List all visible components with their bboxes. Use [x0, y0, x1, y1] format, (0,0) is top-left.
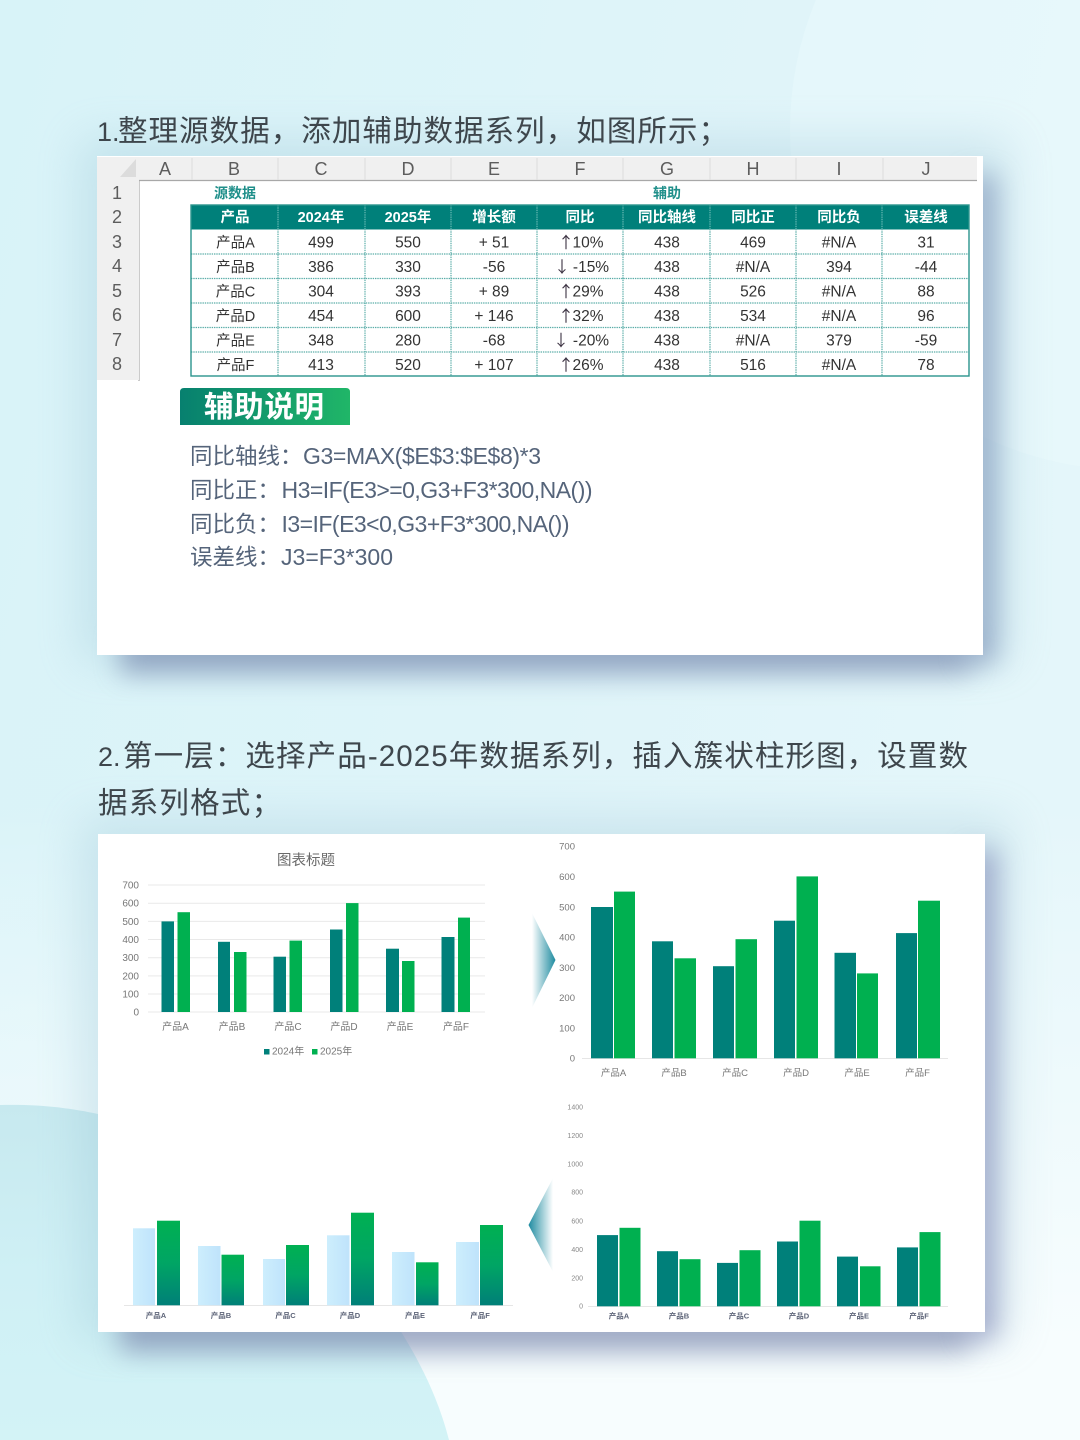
data table: 438: [654, 284, 680, 300]
data table: [191, 205, 969, 376]
spreadsheet column headers: A: [159, 159, 171, 179]
data table: -20%: [573, 332, 609, 350]
data table: 31: [917, 234, 935, 252]
chart: axis max 1400: 1000: [567, 1162, 583, 1168]
data table: 78: [917, 357, 935, 374]
data table: 2025年: [385, 208, 431, 226]
spreadsheet row headers: 6: [112, 305, 122, 325]
chart: default clustered column: 200: [122, 972, 139, 982]
chart: default clustered column: 产品E: [387, 1020, 414, 1033]
chart: gradient fill columns: 产品B: [211, 1310, 232, 1320]
formula notes: G3=MAX($E$3:$E$8)*3: [303, 443, 541, 469]
data table: 产品A: [216, 234, 255, 252]
data table: 516: [740, 357, 766, 374]
data table: + 107: [474, 357, 514, 374]
chart: default clustered column: 0: [133, 1008, 139, 1018]
title: step 1: 1.: [97, 117, 120, 147]
data table: 520: [395, 357, 421, 374]
spreadsheet column headers: J: [922, 159, 930, 179]
chart: no gridlines: [559, 842, 948, 1079]
data table: 348: [308, 332, 334, 350]
data table: ↓: [554, 254, 570, 278]
chart: default clustered column: 500: [122, 917, 139, 928]
title: step 2: 2.: [98, 742, 121, 772]
spreadsheet row headers: 1: [112, 183, 122, 203]
data table: 438: [654, 332, 680, 350]
data table: 26%: [572, 357, 604, 374]
chart: default clustered column: 600: [122, 898, 139, 910]
spreadsheet column headers: C: [314, 159, 328, 179]
chart: no gridlines: 产品A: [601, 1067, 627, 1079]
title: step 2: 第一层：选择产品-2025年数据系列，插入簇状柱形图，设置数: [123, 740, 968, 773]
data table: 产品E: [216, 332, 255, 350]
chart: default clustered column: 图表标题: [277, 852, 335, 869]
legend: [264, 1044, 352, 1058]
data table: 304: [308, 284, 334, 300]
data table: 产品: [220, 209, 250, 226]
data table: #N/A: [822, 308, 857, 325]
data table: 379: [826, 332, 852, 350]
chart: default clustered column: 产品D: [330, 1020, 358, 1033]
data table: 454: [308, 308, 334, 325]
data table: 29%: [572, 284, 604, 300]
title: step 2: [98, 740, 968, 820]
chart: axis max 1400: 产品D: [789, 1310, 810, 1320]
data table: 同比: [566, 209, 594, 226]
chart: no gridlines: 产品E: [844, 1067, 870, 1079]
chart: default clustered column: 700: [122, 880, 139, 892]
chart: no gridlines: 产品B: [661, 1067, 687, 1079]
spreadsheet row headers: 7: [112, 330, 122, 350]
chart: default clustered column: 产品C: [274, 1020, 302, 1033]
chart: no gridlines: 300: [559, 963, 575, 974]
chart: default clustered column: 产品F: [443, 1020, 469, 1033]
panel: chart formatting steps: [98, 834, 985, 1332]
data table: 同比轴线: [638, 208, 696, 226]
data table: 394: [826, 259, 852, 276]
data table: -44: [915, 259, 938, 276]
data table: 误差线: [904, 208, 948, 226]
chart: gradient fill columns: 产品D: [340, 1310, 361, 1320]
chart: default clustered column: 产品B: [219, 1020, 246, 1033]
chart: no gridlines: 产品D: [783, 1067, 809, 1079]
chart: axis max 1400: [567, 1104, 948, 1320]
chart: axis max 1400: 产品E: [849, 1310, 869, 1320]
data table: 280: [395, 332, 421, 350]
legend: 2025年: [320, 1044, 352, 1058]
data table: -15%: [573, 259, 609, 276]
data table: #N/A: [736, 332, 771, 350]
chart: axis max 1400: 1400: [567, 1104, 583, 1112]
panel shadows: [80, 138, 1010, 1352]
data table: 同比正: [731, 209, 775, 226]
data table: #N/A: [822, 284, 857, 300]
chart: axis max 1400: 产品B: [669, 1310, 690, 1320]
data table: 386: [308, 259, 334, 276]
spreadsheet column headers: G: [660, 159, 674, 179]
arrow: right: [532, 913, 556, 1008]
chart: axis max 1400: 产品A: [609, 1310, 630, 1320]
data table: 产品F: [217, 357, 255, 374]
formula notes: I3=IF(E3<0,G3+F3*300,NA()): [282, 511, 570, 537]
title: step 1: 整理源数据，添加辅助数据系列，如图所示；: [118, 115, 728, 148]
spreadsheet column headers: I: [836, 159, 842, 179]
data table: #N/A: [736, 259, 771, 276]
data table: 438: [654, 259, 680, 276]
data table: 330: [395, 259, 421, 276]
panel: source data spreadsheet: [97, 156, 983, 655]
chart: axis max 1400: 产品C: [729, 1310, 750, 1320]
chart: default clustered column: 300: [122, 953, 139, 964]
formula notes: 误差线：: [190, 545, 280, 570]
chart: axis max 1400: 800: [571, 1190, 583, 1196]
spreadsheet column headers: D: [402, 159, 414, 179]
chart: no gridlines: 100: [559, 1024, 575, 1034]
data table: 增长额: [472, 208, 516, 226]
data table: 产品D: [216, 308, 255, 325]
data table: + 51: [479, 234, 509, 252]
group labels: 源数据: [214, 185, 256, 201]
spreadsheet column headers: H: [746, 159, 760, 179]
badge: helper notes: 辅助说明: [204, 391, 324, 424]
data table: -68: [483, 332, 505, 350]
data table: -56: [483, 259, 505, 276]
legend: 2024年: [272, 1044, 304, 1058]
data table: 产品B: [216, 259, 255, 276]
spreadsheet column headers: F: [574, 159, 586, 179]
chart: no gridlines: 400: [559, 932, 575, 944]
formula notes: [190, 443, 592, 570]
data table: 同比负: [817, 209, 861, 226]
chart: default clustered column: [122, 852, 485, 1058]
data table: 10%: [572, 234, 604, 252]
formula notes: H3=IF(E3>=0,G3+F3*300,NA()): [282, 477, 592, 503]
spreadsheet column headers: B: [228, 159, 240, 179]
chart: no gridlines: 700: [559, 842, 575, 852]
spreadsheet column headers: [97, 157, 977, 381]
chart: gradient fill columns: 产品E: [405, 1310, 425, 1320]
data table: 526: [740, 284, 766, 300]
chart: default clustered column: 产品A: [162, 1020, 189, 1033]
formula notes: J3=F3*300: [281, 544, 393, 570]
data table: 88: [917, 284, 935, 300]
chart: no gridlines: 0: [570, 1054, 575, 1064]
data table: 438: [654, 357, 680, 374]
chart: gradient fill columns: 产品F: [470, 1310, 490, 1320]
data table: 469: [740, 234, 766, 252]
chart: axis max 1400: 产品F: [909, 1310, 929, 1320]
badge: helper notes: [180, 388, 350, 425]
data table: ↑: [558, 352, 574, 376]
data table: 32%: [572, 308, 604, 325]
data table: 438: [654, 308, 680, 325]
data table: + 89: [479, 284, 509, 300]
chart: axis max 1400: 200: [571, 1276, 583, 1282]
chart: no gridlines: 200: [559, 993, 575, 1004]
group labels: 辅助: [653, 185, 681, 201]
data table: #N/A: [822, 234, 857, 252]
data table: 600: [395, 308, 421, 325]
spreadsheet row headers: 3: [112, 232, 122, 252]
data table: + 146: [474, 308, 514, 325]
formula notes: 同比轴线：: [190, 444, 303, 469]
formula notes: 同比正：: [190, 478, 280, 503]
data table: 499: [308, 234, 334, 252]
chart: gradient fill columns: 产品A: [146, 1310, 167, 1320]
chart: no gridlines: 500: [559, 902, 575, 914]
chart: axis max 1400: 400: [571, 1247, 583, 1254]
title: step 2: 据系列格式；: [98, 787, 281, 820]
spreadsheet row headers: 4: [112, 256, 122, 276]
spreadsheet row headers: [97, 180, 139, 380]
spreadsheet row headers: 8: [112, 354, 122, 374]
data table: 2024年: [298, 208, 344, 226]
data table: ↓: [553, 327, 569, 351]
spreadsheet column headers: E: [488, 159, 500, 179]
data table: 413: [308, 357, 334, 374]
data table: 534: [740, 308, 766, 325]
data table: 393: [395, 284, 421, 300]
chart: no gridlines: 600: [559, 872, 575, 883]
data table: 550: [395, 234, 421, 252]
data table: ↑: [558, 302, 574, 326]
data table: ↑: [558, 229, 574, 253]
data table: 产品C: [216, 284, 255, 300]
chart: default clustered column: 100: [122, 990, 139, 1000]
chart: no gridlines: 产品F: [905, 1067, 930, 1079]
data table: 438: [654, 234, 680, 252]
data table: -59: [915, 332, 937, 350]
chart: default clustered column: 400: [122, 935, 139, 946]
chart: no gridlines: 产品C: [722, 1067, 748, 1079]
chart: axis max 1400: 0: [579, 1304, 583, 1310]
spreadsheet row headers: 2: [112, 207, 122, 227]
data table: 96: [917, 308, 935, 325]
data table: #N/A: [822, 357, 857, 374]
spreadsheet row headers: 5: [112, 281, 122, 301]
formula notes: 同比负：: [190, 512, 280, 537]
arrow: left: [528, 1178, 553, 1272]
chart: axis max 1400: 1200: [567, 1133, 583, 1140]
data table: ↑: [558, 278, 574, 302]
chart: gradient fill columns: [124, 1213, 513, 1320]
group labels: [214, 185, 681, 201]
chart: axis max 1400: 600: [571, 1218, 583, 1226]
chart: gradient fill columns: 产品C: [275, 1310, 296, 1320]
